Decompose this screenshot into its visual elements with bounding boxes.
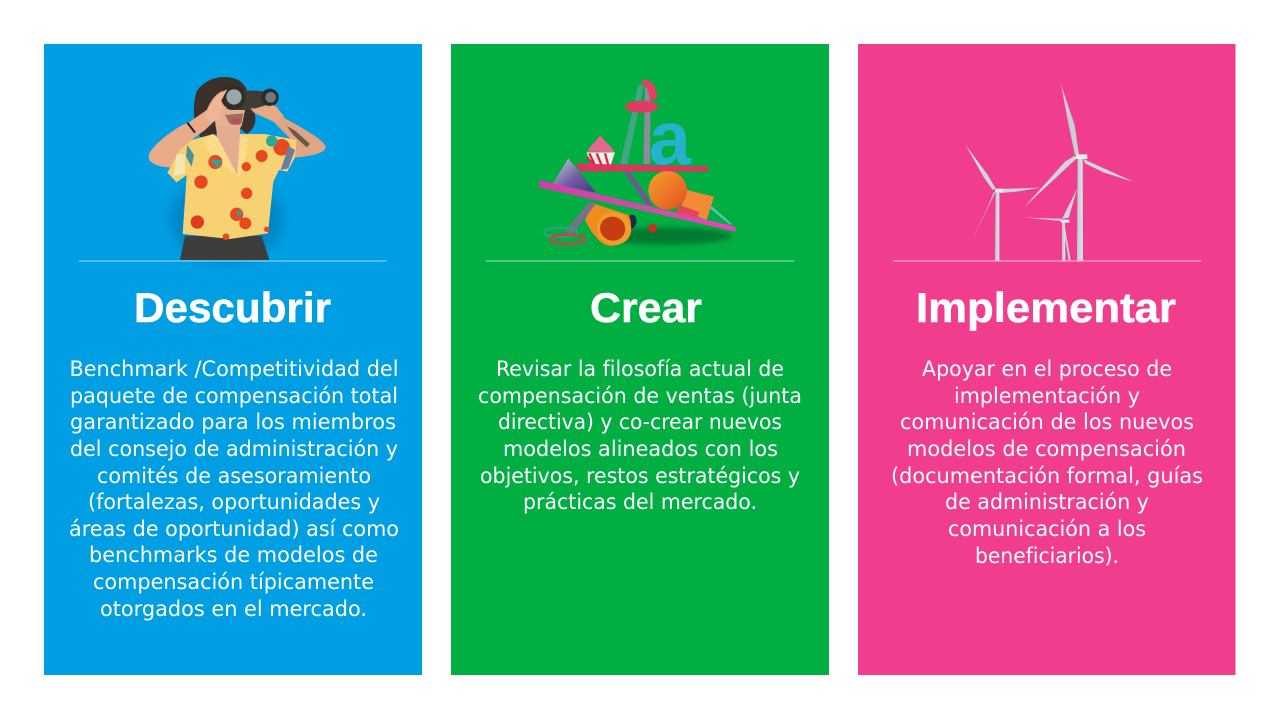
large turbine xyxy=(1024,84,1134,260)
text block: benchmarks de modelos de xyxy=(89,543,378,568)
divider xyxy=(79,260,387,262)
illustration: balanced 3D objects: a xyxy=(649,96,692,181)
text block: compensación de ventas (junta xyxy=(478,384,802,409)
illustration: woman with binoculars xyxy=(149,77,326,263)
text block: prácticas del mercado. xyxy=(523,490,757,515)
text block: Revisar la filosofía actual de xyxy=(496,357,784,382)
text block: directiva) y co-crear nuevos xyxy=(498,410,782,435)
text block: comunicación de los nuevos xyxy=(900,410,1194,435)
heading: Crear xyxy=(590,284,702,331)
text block: (fortalezas, oportunidades y xyxy=(88,490,380,515)
illustration: wind turbines xyxy=(965,84,1134,260)
text block: comunicación a los xyxy=(948,517,1146,542)
panel background: green xyxy=(451,44,829,675)
heading: Descubrir xyxy=(134,284,331,331)
text block xyxy=(69,357,399,622)
text block: compensación típicamente xyxy=(93,570,374,595)
text block: implementación y xyxy=(954,384,1140,409)
divider xyxy=(893,260,1201,262)
heading: Implementar xyxy=(916,284,1176,331)
text block: comités de asesoramiento xyxy=(97,464,371,489)
panel: Implementar xyxy=(858,44,1236,675)
small rear turbine xyxy=(1023,188,1077,260)
text block: Benchmark /Competitividad del xyxy=(70,357,398,382)
panel: Descubrir xyxy=(44,44,422,675)
text block: Apoyar en el proceso de xyxy=(922,357,1172,382)
text block: de administración y xyxy=(945,490,1149,515)
text block: áreas de oportunidad) así como xyxy=(69,517,399,542)
divider xyxy=(486,260,794,262)
left turbine xyxy=(965,144,1041,260)
text block: modelos alineados con los xyxy=(503,437,778,462)
illustration: balanced 3D objects xyxy=(539,80,736,249)
text block: (documentación formal, guías xyxy=(891,464,1203,489)
panel background: pink xyxy=(858,44,1236,675)
text block: modelos de compensación xyxy=(907,437,1186,462)
text block: del consejo de administración y xyxy=(70,437,398,462)
panel background: blue xyxy=(44,44,422,675)
text block xyxy=(478,357,802,515)
text block: paquete de compensación total xyxy=(70,384,398,409)
text block: otorgados en el mercado. xyxy=(100,597,367,622)
text block xyxy=(891,357,1203,569)
panel: Crear xyxy=(451,44,829,675)
text block: garantizado para los miembros xyxy=(70,410,396,435)
text block: objetivos, restos estratégicos y xyxy=(480,464,800,489)
text block: beneficiarios). xyxy=(975,544,1119,569)
